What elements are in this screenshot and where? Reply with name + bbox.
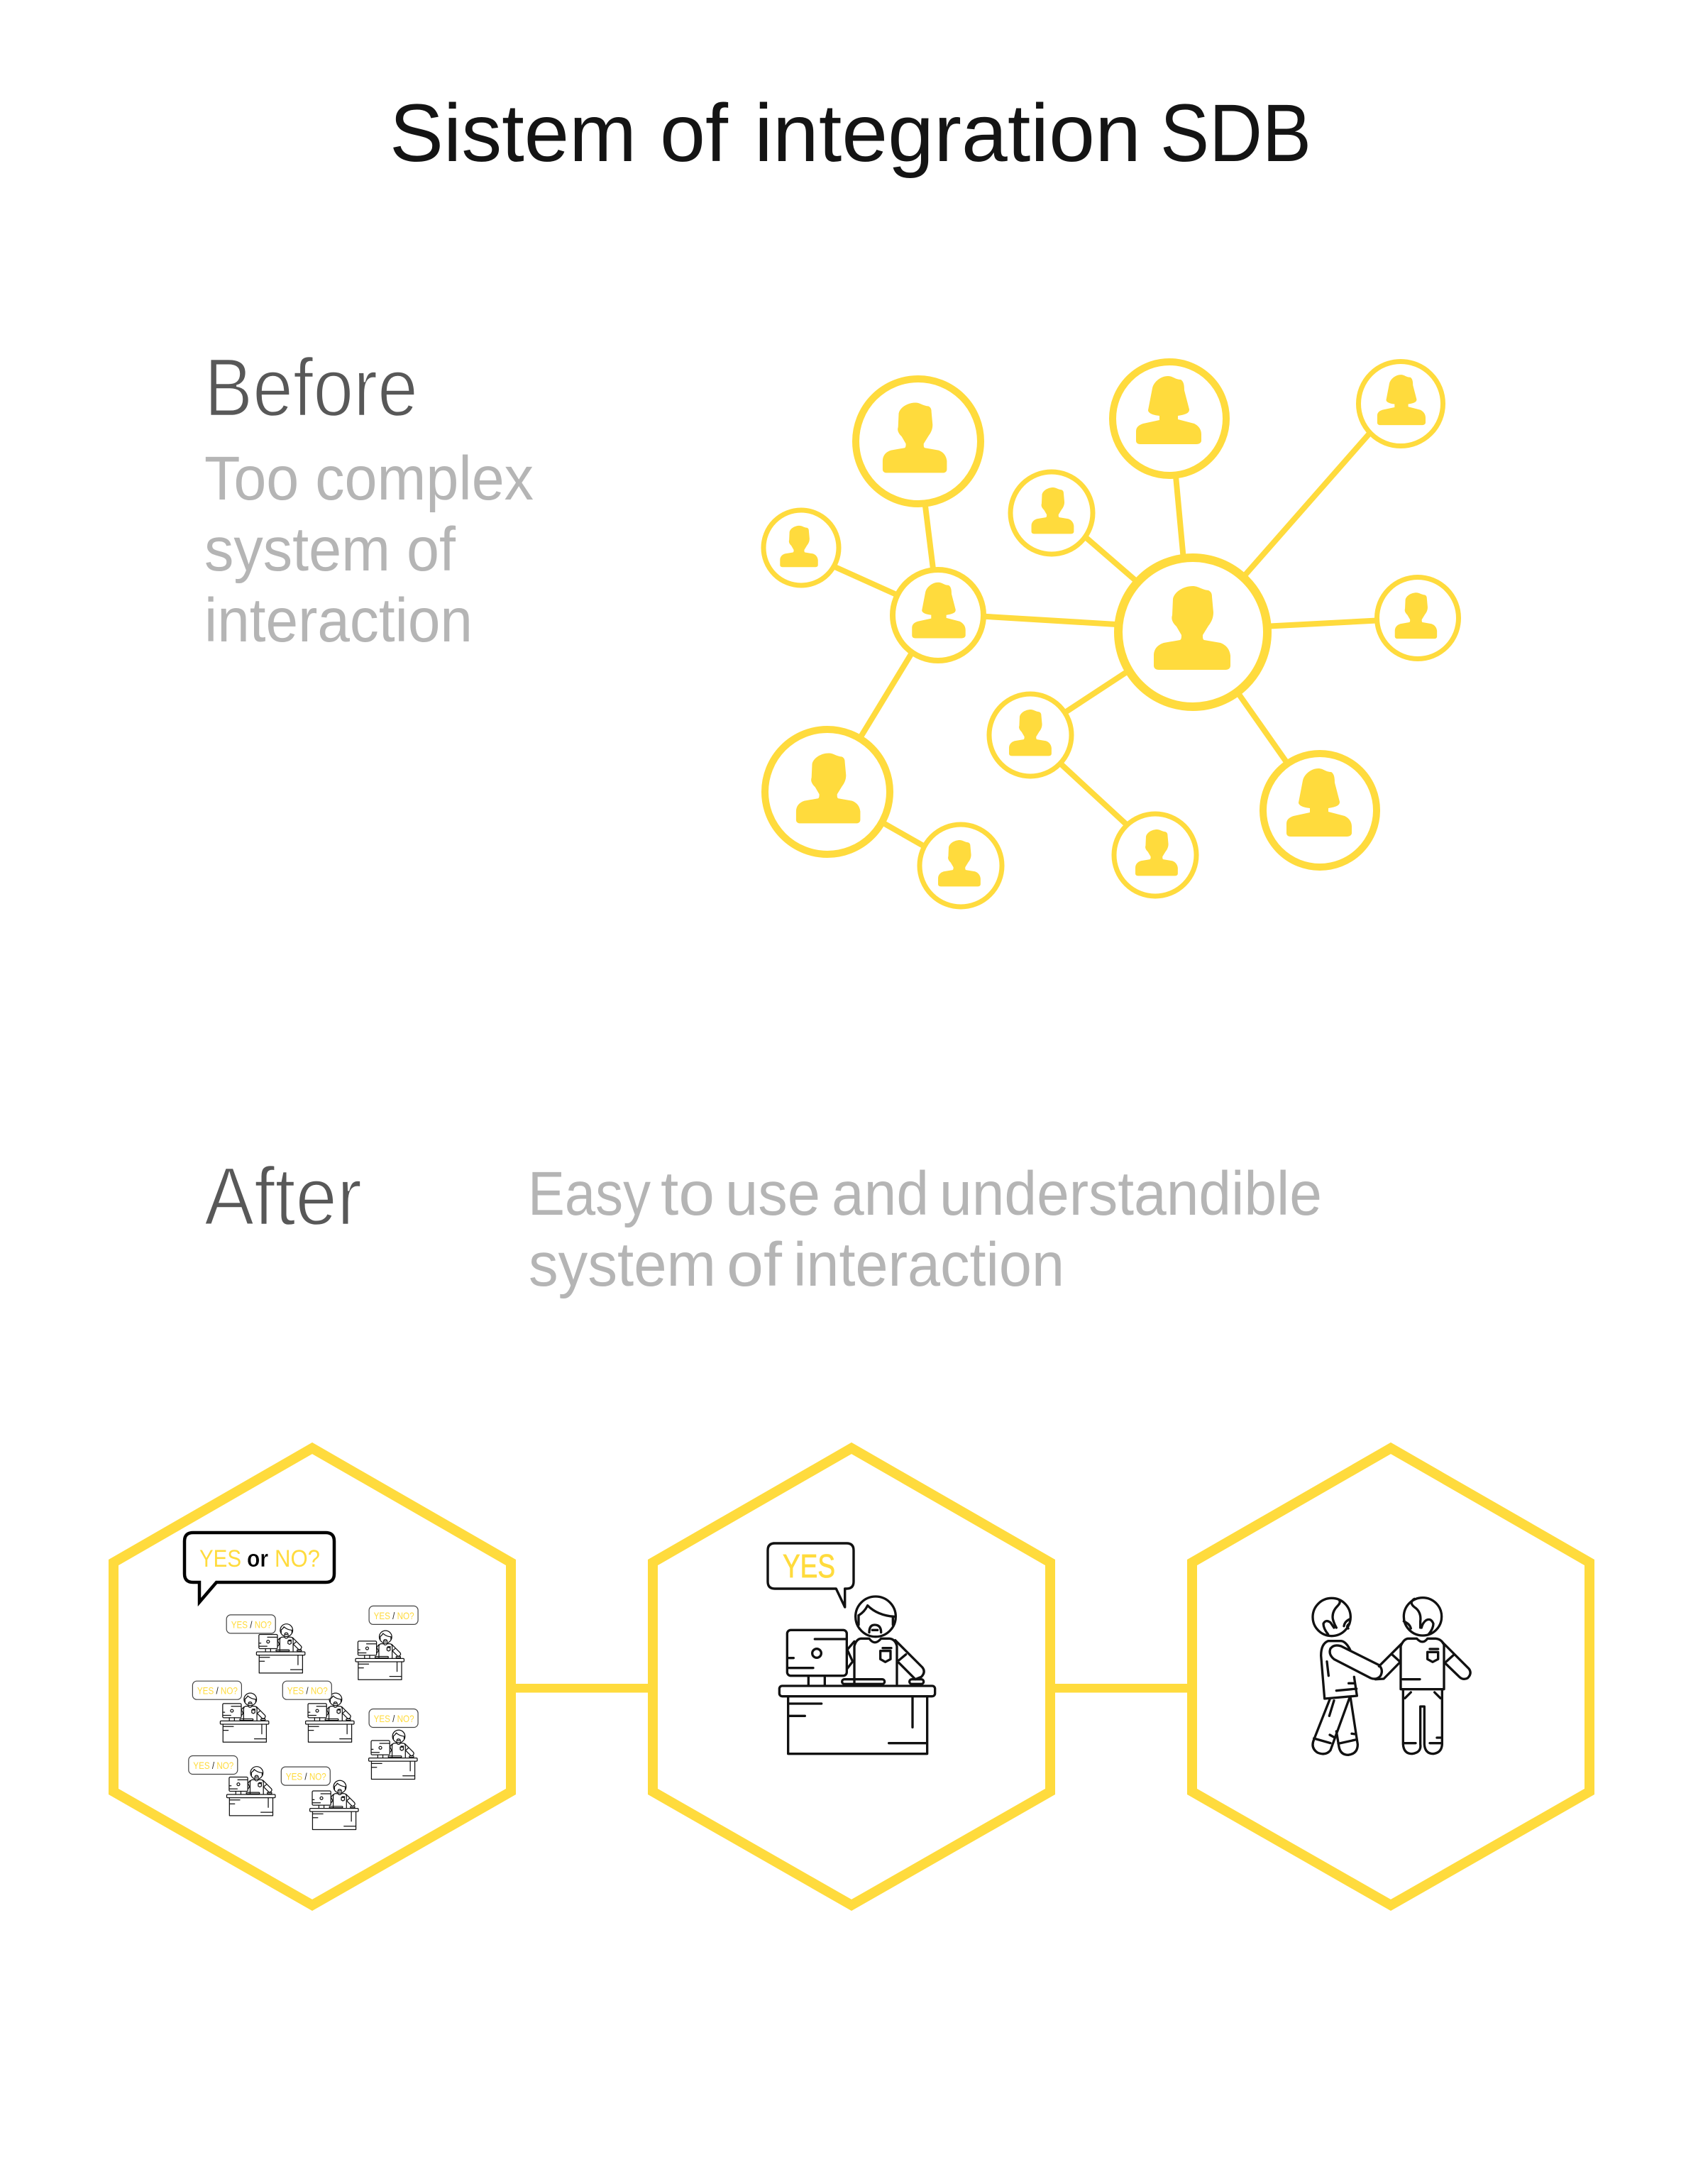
text block: after description: of — [727, 1230, 783, 1299]
node bottom-left large — [765, 729, 890, 854]
text block: after description: to — [661, 1159, 715, 1228]
small speech bubbles: YES / NO? — [374, 1610, 414, 1621]
text block: after description — [528, 1159, 1322, 1299]
small speech bubbles: YES / NO? — [286, 1771, 326, 1782]
icon: two people shaking hands — [1313, 1598, 1470, 1755]
node bottom-middle — [1114, 814, 1196, 896]
node top-middle female — [1113, 362, 1226, 475]
worker at desk — [779, 1596, 935, 1754]
text block: after description: system — [529, 1230, 716, 1299]
text block: after description: understandible — [939, 1159, 1322, 1228]
hub node — [1118, 558, 1267, 707]
connector: hexagon 1 to 2 — [511, 1684, 653, 1693]
text block: after description: interaction — [793, 1230, 1064, 1299]
node bottom-right female — [1263, 754, 1377, 867]
big speech bubble: YES — [199, 1545, 241, 1572]
hexagon 1: many workers — [114, 1448, 511, 1905]
text block: before description: Too complex — [204, 444, 534, 513]
text block: before description: system of — [204, 515, 456, 584]
title: integration — [754, 88, 1141, 179]
small speech bubbles: YES / NO? — [287, 1685, 328, 1697]
big speech bubble — [184, 1533, 334, 1602]
node right — [1377, 578, 1459, 658]
node bottom small — [920, 824, 1002, 907]
small speech bubbles: YES / NO? — [374, 1713, 414, 1724]
connector: hexagon 2 to 3 — [1050, 1684, 1192, 1693]
node far left — [764, 510, 839, 585]
text block: before description — [204, 444, 534, 655]
speech bubble YES: YES — [783, 1548, 835, 1584]
heading: Before: Before — [204, 341, 418, 434]
node lower-middle — [989, 694, 1071, 776]
heading: After: After — [204, 1150, 362, 1242]
node top-right female — [1358, 362, 1443, 446]
hexagon 2: one worker says yes — [653, 1448, 1050, 1905]
title — [390, 88, 1311, 179]
speech bubble YES — [768, 1543, 854, 1607]
text block: after description: use — [725, 1159, 820, 1228]
node secondary hub female — [893, 570, 983, 661]
node top-left large — [856, 379, 981, 504]
text block: after description: and — [832, 1159, 929, 1228]
network diagram: complex system — [764, 362, 1459, 907]
text block: before description: interaction — [204, 586, 473, 655]
title: Sistem — [390, 88, 636, 179]
node near hub — [1010, 472, 1093, 554]
title: of — [660, 88, 729, 179]
big speech bubble: or — [247, 1545, 268, 1572]
small workers — [220, 1624, 417, 1829]
small speech bubbles: YES / NO? — [231, 1618, 272, 1630]
small speech bubbles: YES / NO? — [197, 1685, 238, 1697]
big speech bubble: NO? — [275, 1545, 320, 1572]
small speech bubbles — [189, 1606, 418, 1785]
hexagon 3: handshake — [1192, 1448, 1589, 1905]
small speech bubbles: YES / NO? — [193, 1760, 233, 1771]
connecting lines — [830, 429, 1384, 849]
text block: after description: Easy — [528, 1159, 651, 1228]
title: SDB — [1160, 88, 1311, 179]
